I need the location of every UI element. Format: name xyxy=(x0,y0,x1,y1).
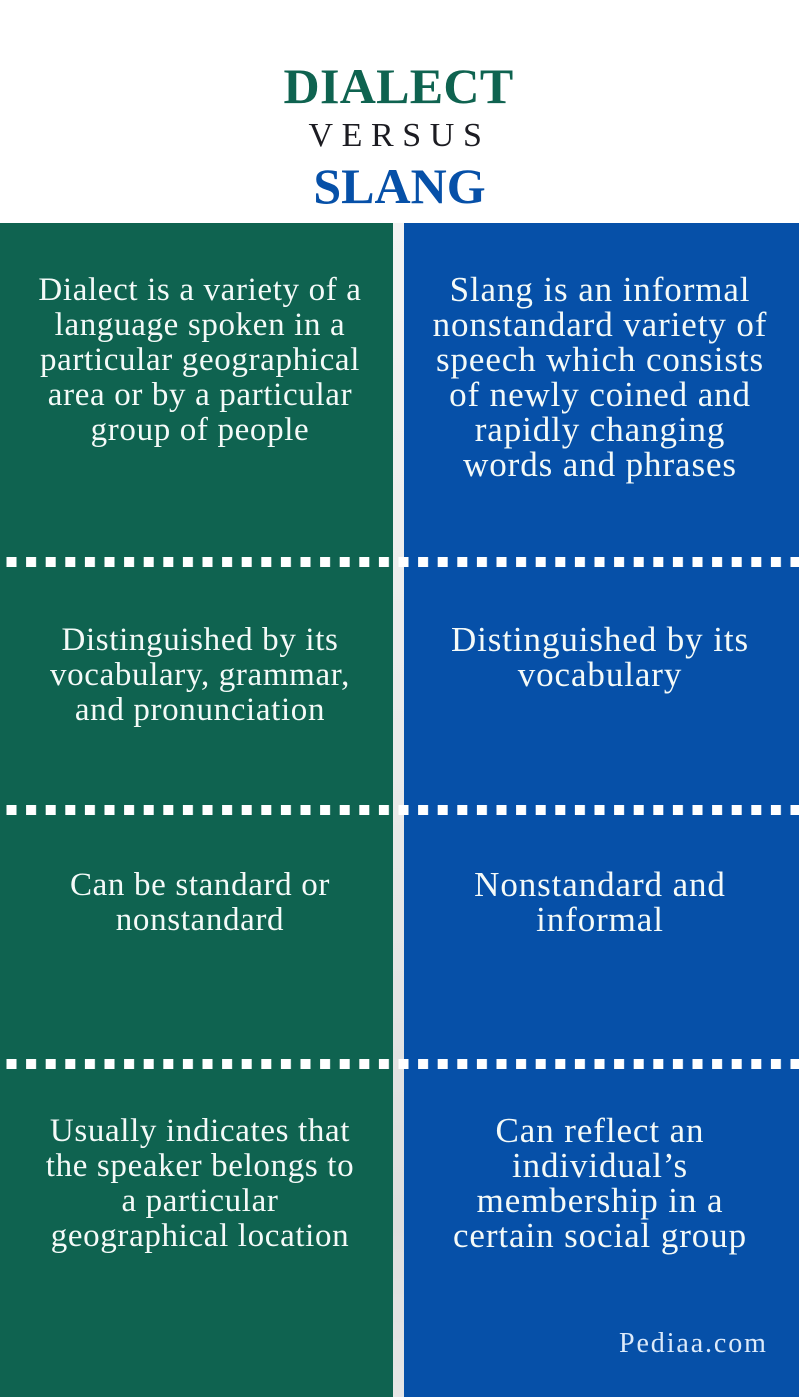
text: dialect formality: Can be standard or xyxy=(70,867,330,903)
text: dialect features: and pronunciation xyxy=(75,692,325,728)
panel: centre gutter xyxy=(393,223,404,1397)
dotted divider 2 xyxy=(6,805,799,815)
text: dialect indication: geographical location xyxy=(51,1218,349,1254)
text: slang indication: individual’s xyxy=(512,1146,688,1185)
text: dialect features: vocabulary, grammar, xyxy=(50,657,350,693)
text: slang indication xyxy=(453,1111,747,1255)
text: slang definition: Slang is an informal xyxy=(450,270,750,309)
panel: dialect column xyxy=(0,223,393,1397)
dotted divider 1 xyxy=(6,557,799,567)
dotted divider 3 xyxy=(6,1059,799,1069)
text: dialect definition: language spoken in a xyxy=(55,307,345,343)
text: dialect features xyxy=(50,622,350,728)
title: versus: VERSUS xyxy=(308,117,490,154)
text: dialect definition: group of people xyxy=(91,412,309,448)
text: dialect definition: Dialect is a variety of a xyxy=(38,272,362,308)
text: dialect indication xyxy=(46,1113,354,1254)
title block xyxy=(284,58,513,214)
title: Dialect: DIALECT xyxy=(284,58,513,114)
text: slang formality: informal xyxy=(536,900,664,939)
text: slang definition xyxy=(433,270,767,484)
text: dialect formality: nonstandard xyxy=(116,902,284,938)
text: dialect definition xyxy=(38,272,362,448)
text: slang definition: nonstandard variety of xyxy=(433,305,767,344)
text: slang definition: words and phrases xyxy=(463,445,737,484)
title: Slang: SLANG xyxy=(313,158,486,214)
text: slang definition: of newly coined and xyxy=(449,375,751,414)
panel: slang column xyxy=(404,223,799,1397)
text: slang indication: certain social group xyxy=(453,1216,747,1255)
text: dialect indication: Usually indicates that xyxy=(50,1113,350,1149)
text: dialect indication: the speaker belongs to xyxy=(46,1148,354,1184)
text: slang formality: Nonstandard and xyxy=(474,865,726,904)
text: slang features: Distinguished by its xyxy=(451,620,749,659)
text: dialect indication: a particular xyxy=(121,1183,279,1219)
text: slang indication: membership in a xyxy=(477,1181,723,1220)
text: slang indication: Can reflect an xyxy=(496,1111,704,1150)
text: slang features xyxy=(451,620,749,694)
text: dialect definition: area or by a particular xyxy=(48,377,352,413)
text: slang formality xyxy=(474,865,726,939)
text: slang features: vocabulary xyxy=(518,655,682,694)
text: dialect formality xyxy=(70,867,330,938)
text: dialect features: Distinguished by its xyxy=(61,622,339,658)
text: slang definition: rapidly changing xyxy=(475,410,725,449)
text: dialect definition: particular geographical xyxy=(40,342,360,378)
logo: Pediaa.com: Pediaa.com xyxy=(619,1328,768,1359)
text: slang definition: speech which consists xyxy=(436,340,764,379)
